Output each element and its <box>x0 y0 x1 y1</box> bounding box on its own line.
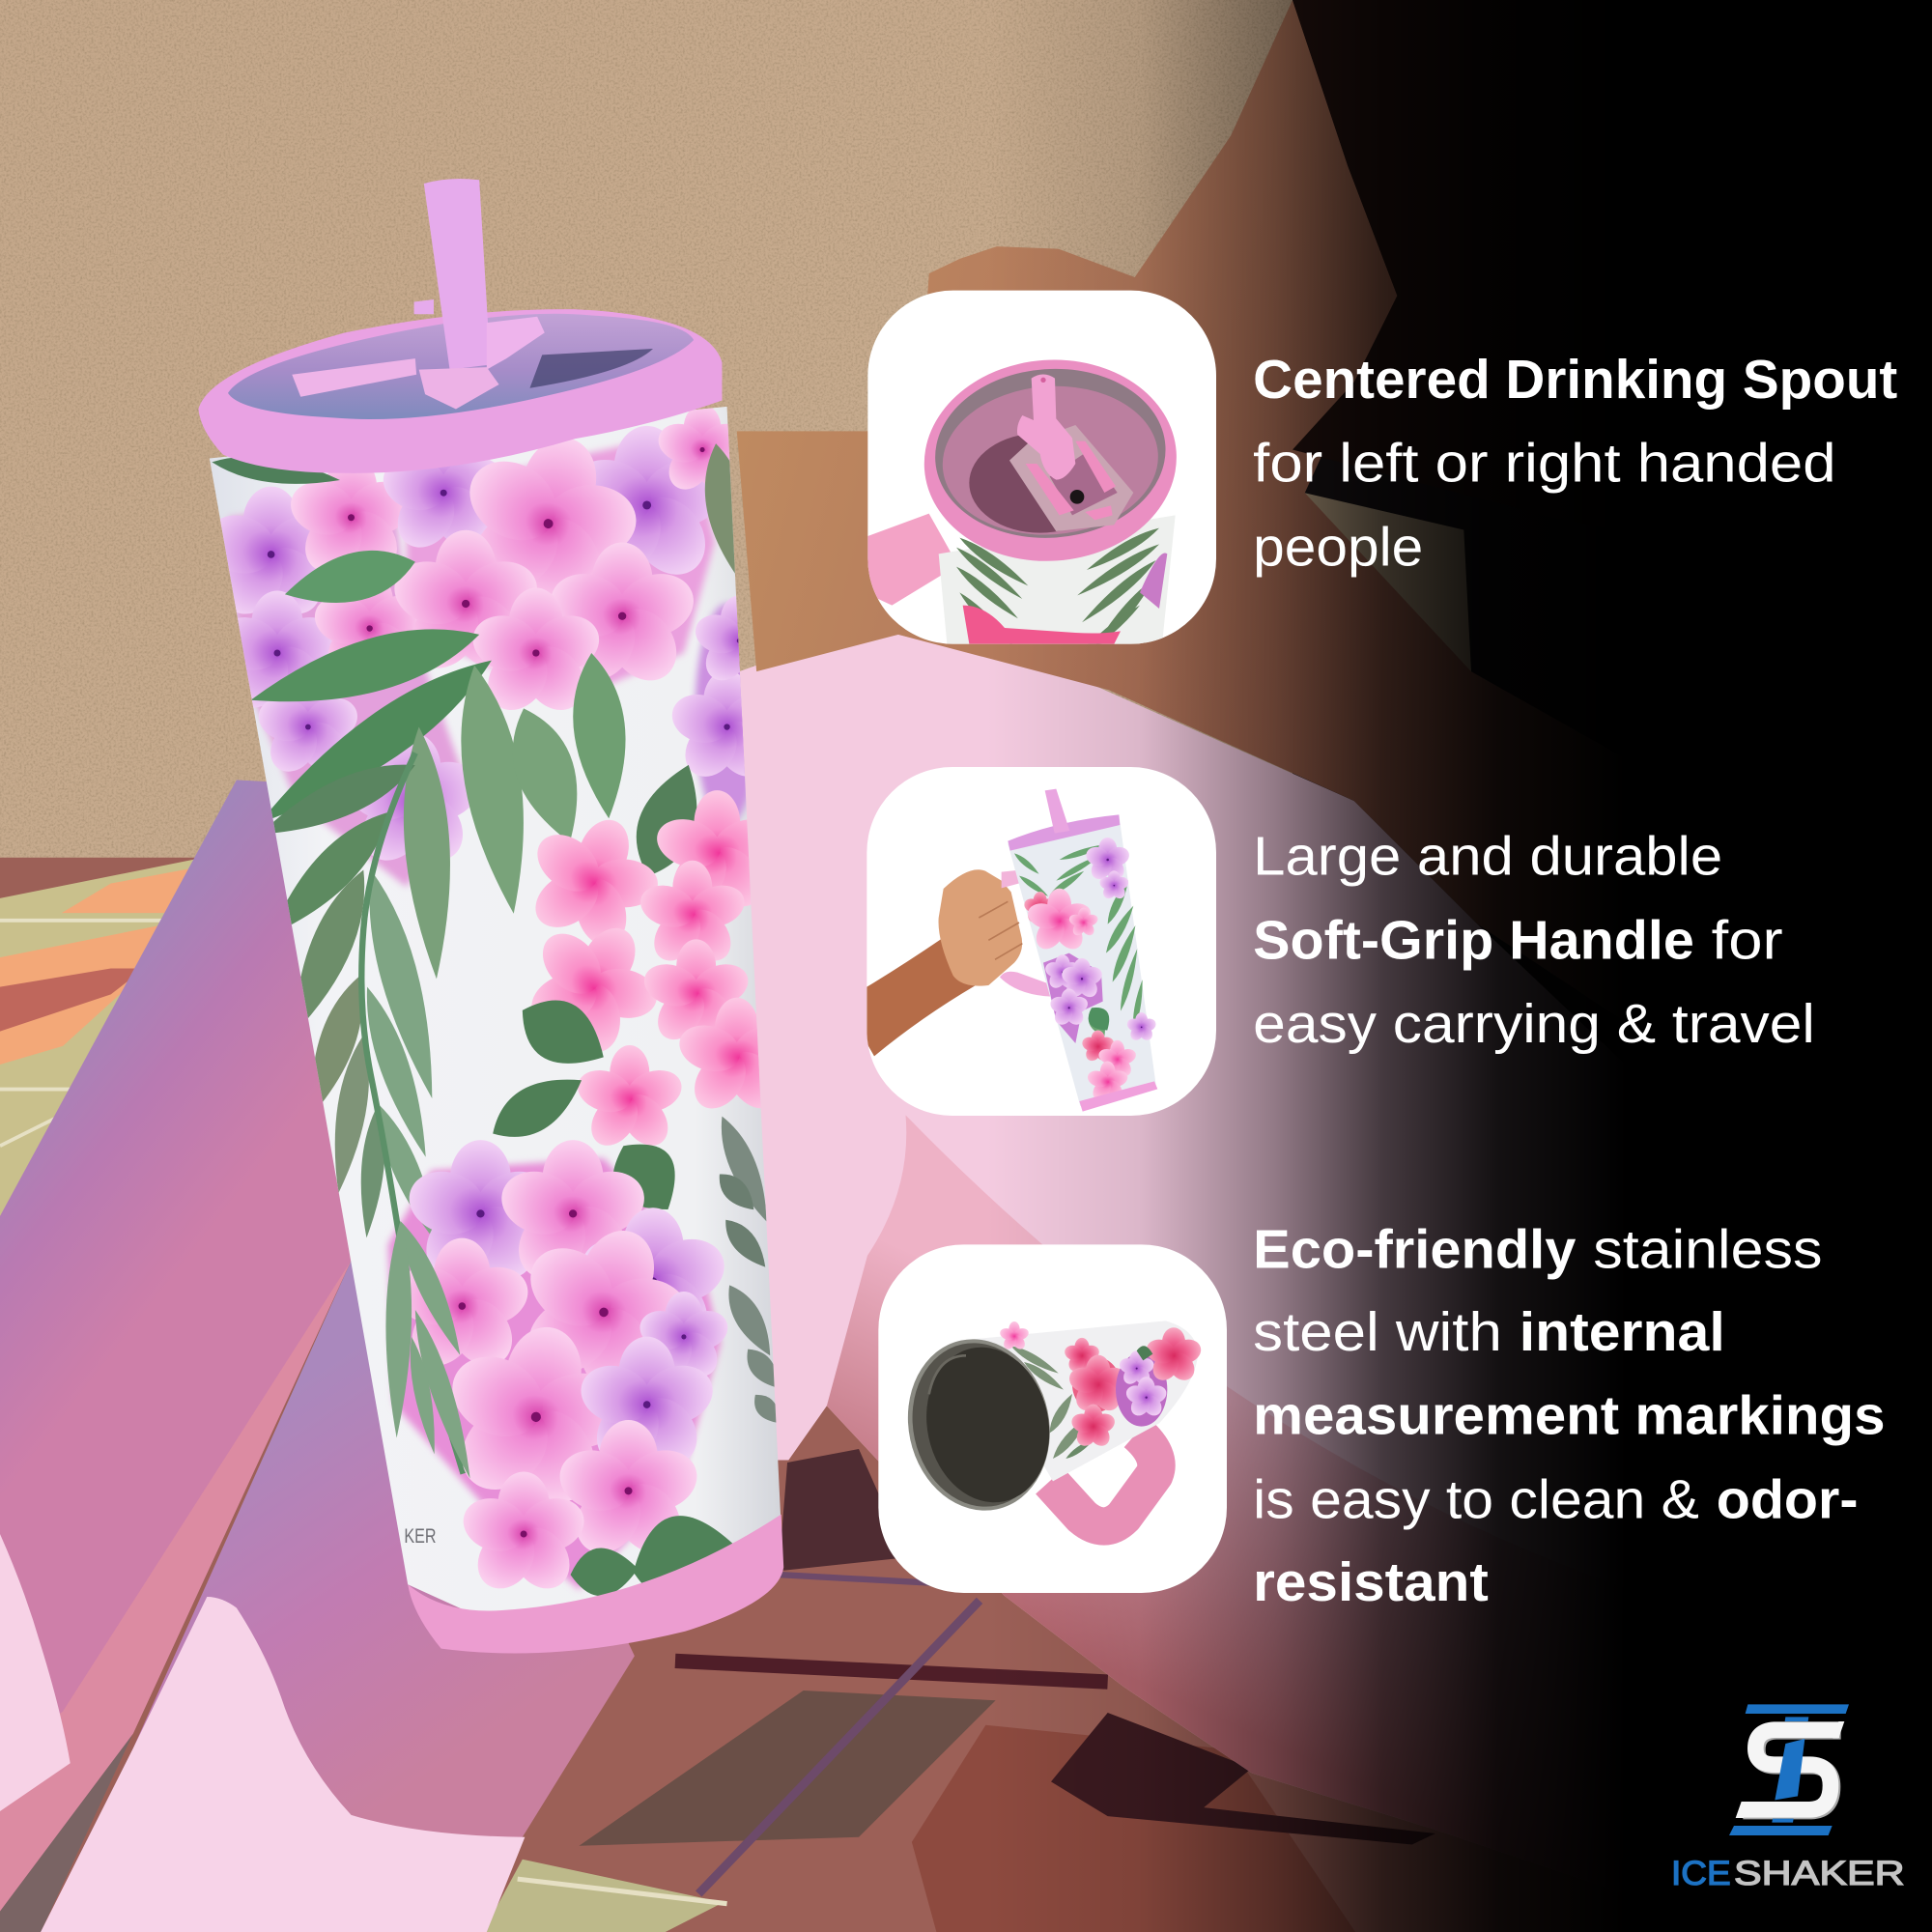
slide rails <box>1026 464 1074 515</box>
leaf and flower print <box>999 1321 1204 1462</box>
body with print <box>939 515 1176 647</box>
palm print <box>953 524 1162 670</box>
dark interior <box>913 1336 1064 1514</box>
lid rim <box>198 309 722 473</box>
handle <box>1050 1433 1156 1526</box>
leg seam band <box>0 1261 352 1911</box>
feature text: soft-grip handle <box>1253 826 1815 1054</box>
logo wordmark <box>1671 1855 1905 1892</box>
right side dark background <box>1293 0 1932 1355</box>
rim <box>918 352 1183 570</box>
brand mark on tumbler: KER <box>404 1523 437 1548</box>
leg highlight <box>0 1534 71 1811</box>
light second leg <box>41 1597 525 1932</box>
tiled floor <box>0 850 1932 1932</box>
feature text: soft-grip handle: easy carrying & travel <box>1253 993 1815 1054</box>
opening rim <box>893 1326 1065 1523</box>
feature text: eco-friendly stainless steel: measurement markings <box>1253 1385 1886 1446</box>
feature text: centered drinking spout: people <box>1253 516 1423 577</box>
second leg in shadow <box>41 1261 635 1932</box>
panel: eco-friendly stainless interior <box>878 1244 1227 1593</box>
spout <box>1017 374 1075 480</box>
tumbler base <box>408 1515 783 1653</box>
tumbler body <box>210 407 781 1627</box>
hand <box>939 869 1022 986</box>
lid interior <box>929 361 1171 546</box>
base <box>1079 1081 1157 1112</box>
panel background <box>867 767 1216 1116</box>
feature text: eco-friendly stainless steel: Eco-friendly <box>1253 1218 1576 1279</box>
hair <box>1293 0 1932 591</box>
feature text: eco-friendly stainless steel: steel with <box>1253 1301 1502 1362</box>
body <box>1008 814 1156 1106</box>
handle <box>867 514 958 606</box>
green palm print <box>1012 841 1146 1039</box>
flowers print <box>1022 892 1058 925</box>
logo wordmark: ICE <box>1671 1855 1731 1892</box>
feature text: soft-grip handle: for <box>1712 909 1783 970</box>
feature text: centered drinking spout: for left or right handed <box>1253 433 1836 494</box>
feature text: eco-friendly stainless steel <box>1253 1219 1886 1612</box>
feature text: centered drinking spout: Centered Drinking Spout <box>1253 349 1897 410</box>
floral print <box>198 405 800 1620</box>
clear lid <box>228 314 694 419</box>
raised thigh <box>739 635 1932 1932</box>
handle <box>1002 870 1021 888</box>
left leg in shadow <box>0 780 394 1911</box>
straw and spout <box>292 179 545 409</box>
feature text: eco-friendly stainless steel: resistant <box>1253 1551 1489 1612</box>
logo: iceshaker <box>1671 1704 1905 1892</box>
feature text: eco-friendly stainless steel: is easy to clean & <box>1253 1468 1699 1529</box>
feature text: centered drinking spout <box>1253 349 1897 577</box>
main tumbler <box>198 179 800 1653</box>
lower thigh shading <box>827 1115 1932 1932</box>
panel background <box>867 291 1216 644</box>
skin arm <box>737 0 1700 1047</box>
feature text: eco-friendly stainless steel: internal <box>1520 1301 1725 1362</box>
lid <box>1008 814 1120 851</box>
panel: soft-grip handle <box>867 767 1216 1116</box>
logo mark <box>1729 1704 1849 1835</box>
tumbler horizontal body <box>969 1321 1198 1481</box>
arm <box>867 939 976 1056</box>
wall <box>0 0 1479 936</box>
palm fronds and leaves <box>211 440 755 1474</box>
panel: centered drinking spout <box>867 291 1216 670</box>
straw <box>1045 789 1069 834</box>
tumbler top view <box>867 352 1183 670</box>
feature text: soft-grip handle: Soft-Grip Handle <box>1253 909 1694 970</box>
logo wordmark: SHAKER <box>1734 1855 1905 1892</box>
tumbler side view <box>1008 789 1157 1112</box>
lower palm fronds <box>385 1221 470 1478</box>
feature text: eco-friendly stainless steel: stainless <box>1593 1218 1822 1279</box>
panel background <box>878 1244 1227 1593</box>
feature text: eco-friendly stainless steel: odor- <box>1717 1468 1858 1529</box>
feature text: soft-grip handle: Large and durable <box>1253 826 1722 887</box>
slot <box>1009 425 1133 531</box>
wall patch behind arm <box>1305 493 1471 671</box>
flower print <box>963 606 1121 644</box>
